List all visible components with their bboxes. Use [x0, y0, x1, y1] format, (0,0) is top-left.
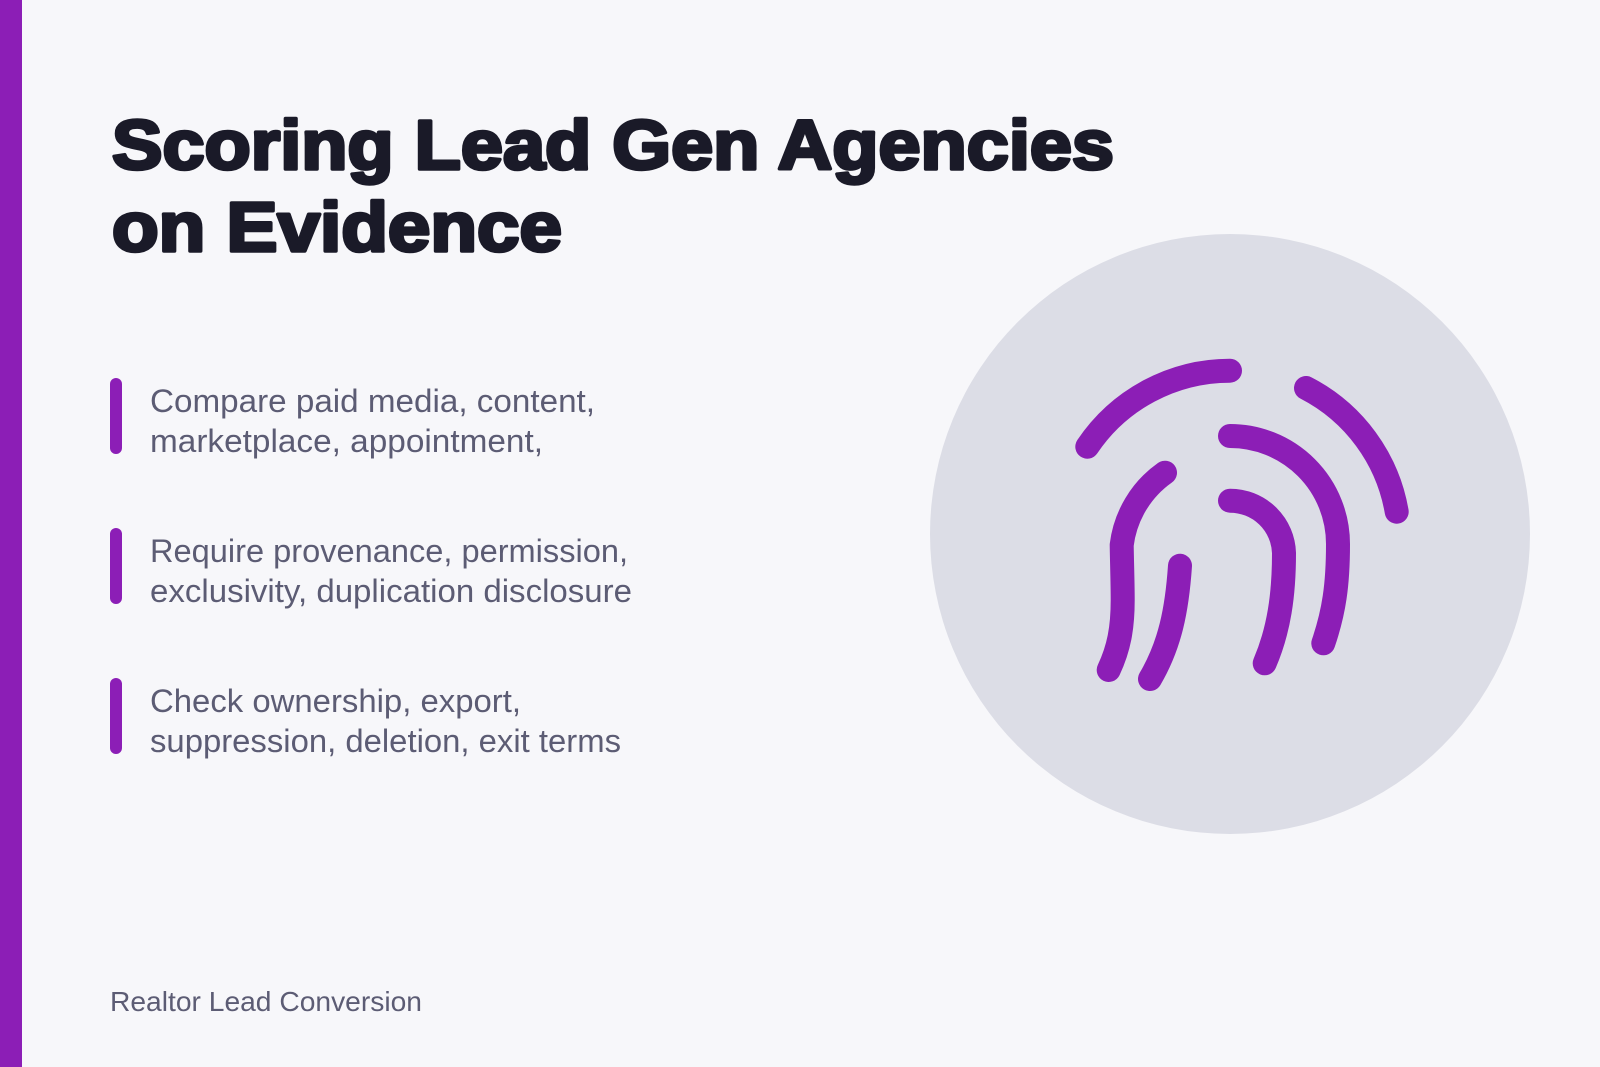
icon: fingerprint: [1087, 371, 1397, 679]
bullet 3 marker: [110, 678, 122, 754]
circle backdrop: [930, 234, 1530, 834]
bullet 3 text: Check ownership, export,: [150, 683, 521, 719]
footer label: Realtor Lead Conversion: [110, 986, 422, 1017]
title: Scoring Lead Gen Agencies: [112, 106, 1114, 184]
bullet 1 text: Compare paid media, content,: [150, 383, 595, 419]
title: [112, 106, 1114, 266]
bullet 3 text: suppression, deletion, exit terms: [150, 723, 621, 759]
bullet 1 text: marketplace, appointment,: [150, 423, 543, 459]
bullet 3 text: [150, 683, 621, 759]
bullet 2 text: exclusivity, duplication disclosure: [150, 573, 632, 609]
bullet 1 text: [150, 383, 595, 459]
bullet 2 text: Require provenance, permission,: [150, 533, 628, 569]
bullet 2: [110, 528, 632, 609]
bullet 3: [110, 678, 621, 759]
left accent bar: [0, 0, 22, 1067]
bullet 2 text: [150, 533, 632, 609]
title: on Evidence: [112, 188, 562, 266]
bullet 1 marker: [110, 378, 122, 454]
bullet 1: [110, 378, 595, 459]
bullet 2 marker: [110, 528, 122, 604]
